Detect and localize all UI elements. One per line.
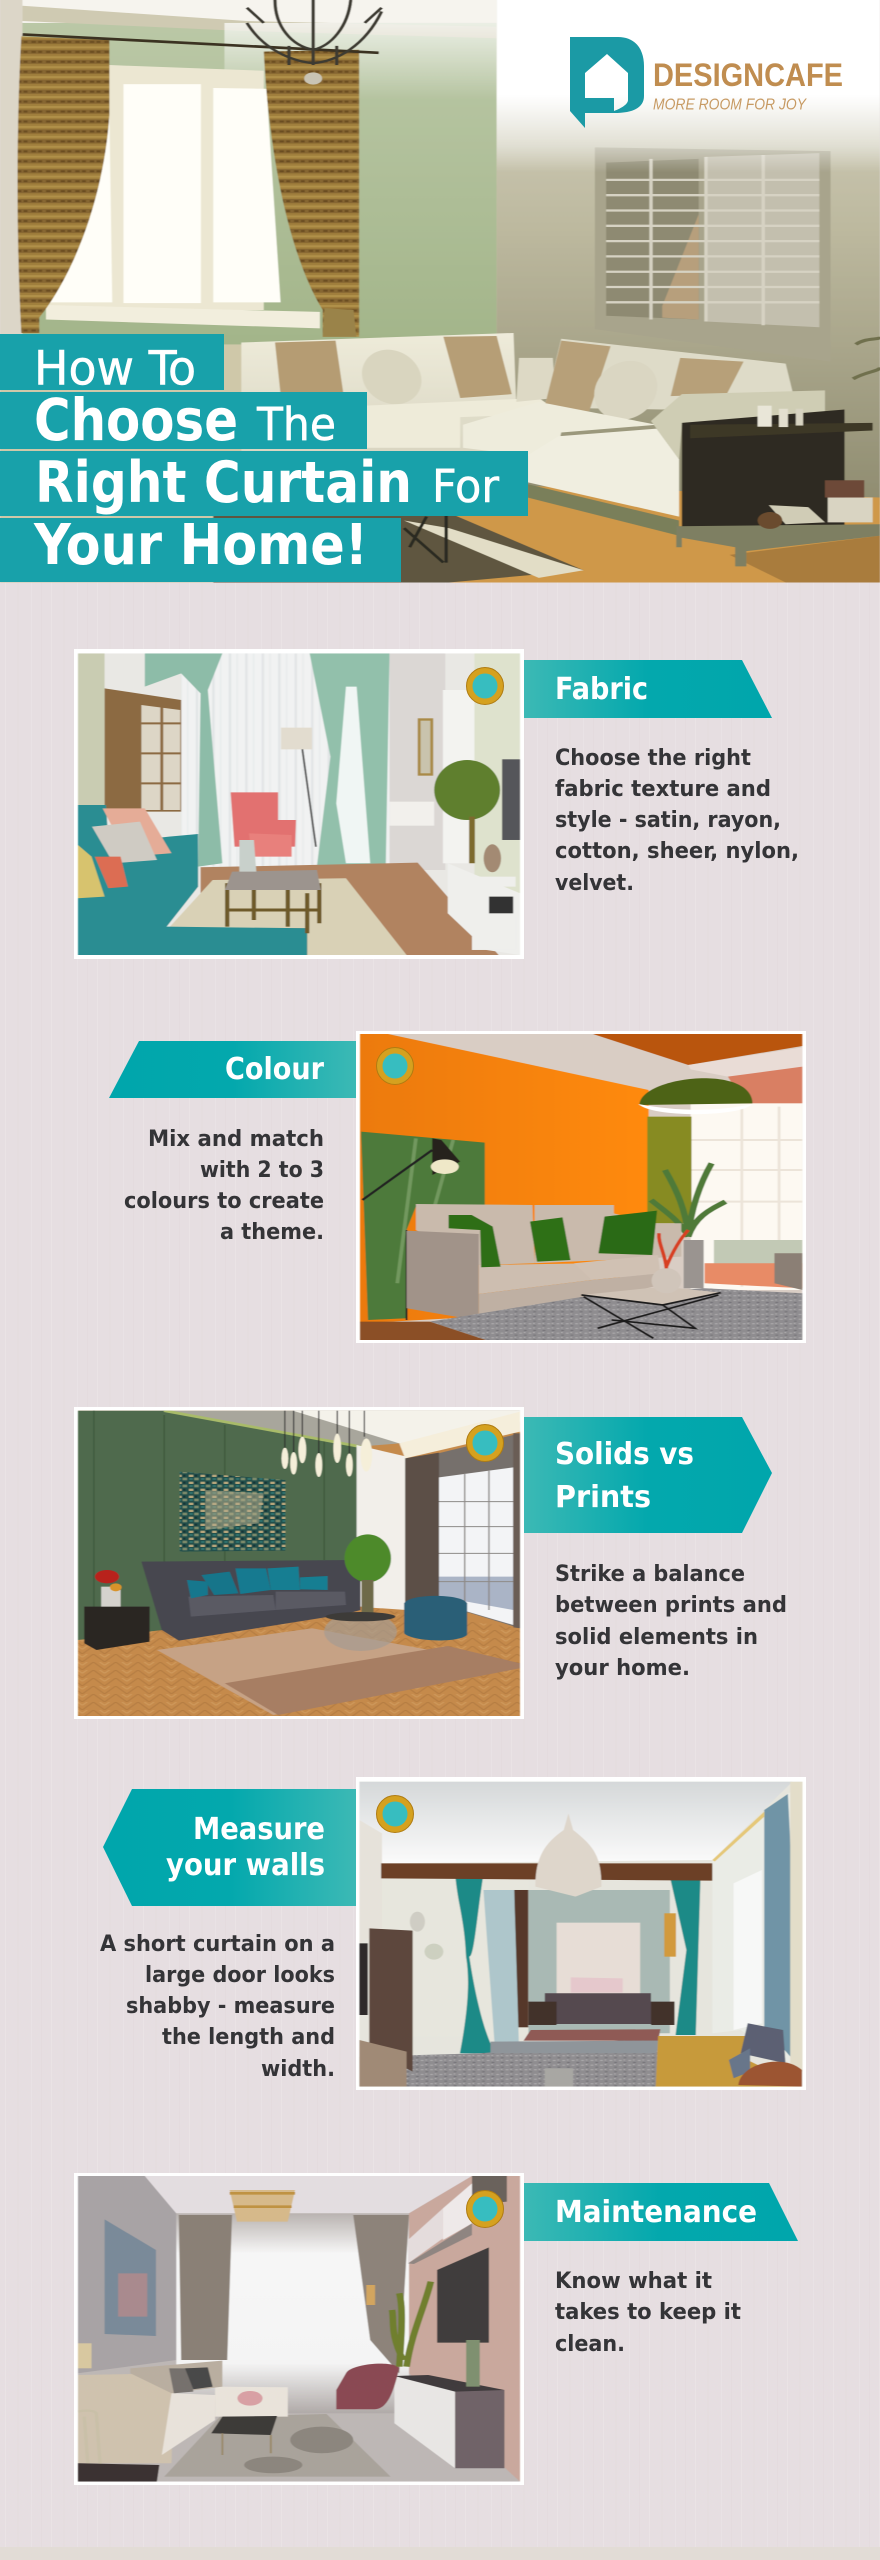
text: colour description: a theme. [220,1219,324,1245]
text: fabric description [555,745,799,896]
text: solids description: solid elements in [555,1624,758,1650]
title line: How To: How To [34,342,196,396]
icon: house speech mark [570,37,644,128]
icon: gold curtain ring [376,1796,414,1832]
heading: maintenance: Maintenance [555,2195,757,2230]
heading: fabric: Fabric [555,672,648,707]
text: measure description: the length and [162,2024,335,2050]
photo: green wall room [78,1411,520,1716]
text: measure description [100,1931,335,2082]
ribbon: fabric [524,660,772,718]
text: maintenance description: takes to keep it [555,2299,741,2325]
text: maintenance description: clean. [555,2331,625,2357]
photo: neutral lounge [78,2176,520,2482]
text: fabric description: style - satin, rayon, [555,807,781,833]
hero photo: living room [0,0,880,582]
text: colour description: colours to create [124,1188,324,1214]
ribbon: measure your walls [103,1789,356,1906]
text: fabric description: cotton, sheer, nylon, [555,838,799,864]
text: solids description: Strike a balance [555,1561,745,1587]
photo frame: fabric [74,649,524,959]
text: maintenance description [555,2268,741,2357]
text: maintenance description: Know what it [555,2268,712,2294]
title line: Right Curtain For: For [432,460,499,513]
photo: orange wall room [360,1034,802,1340]
icon: gold curtain ring [376,1048,414,1084]
heading: solids vs prints: Prints [555,1480,651,1515]
heading: solids vs prints: Solids vs [555,1437,694,1472]
title line: Choose The: The [256,398,336,451]
photo: teal sofa room [78,653,520,955]
title line: Your Home!: Your Home! [33,513,368,578]
ribbon: solids vs prints [524,1417,772,1533]
title bands [0,334,528,582]
footer band [0,2547,880,2560]
text: solids description: your home. [555,1655,690,1681]
panel: solids vs prints [74,1407,787,1719]
text: fabric description: fabric texture and [555,776,771,802]
brand name: DESIGNCAFE [653,57,843,93]
text: colour description: Mix and match [148,1126,324,1152]
panel: fabric [74,649,799,959]
icon: gold curtain ring [466,668,504,704]
text: fabric description: velvet. [555,870,634,896]
tagline: MORE ROOM FOR JOY [653,96,807,114]
panel: colour [109,1031,806,1343]
text: measure description: A short curtain on a [100,1931,335,1957]
text: measure description: shabby - measure [126,1993,335,2019]
ribbon: maintenance [524,2183,798,2241]
panel: measure your walls [100,1777,806,2090]
text: colour description: with 2 to 3 [200,1157,324,1183]
title line: Right Curtain For: Right Curtain [35,450,412,516]
heading: colour: Colour [225,1052,325,1087]
ribbon: colour [109,1041,356,1098]
photo: teal curtain bedroom [359,1782,802,2087]
text: colour description [124,1126,324,1245]
icon: gold curtain ring [466,2190,504,2228]
text: measure description: large door looks [145,1962,335,1988]
icon: gold curtain ring [466,1424,504,1462]
photo frame: solids [74,1407,524,1719]
text: solids description [555,1561,787,1681]
heading: measure your walls: Measure [193,1812,325,1847]
logo: DesignCafe [570,37,843,128]
hero banner [0,0,880,582]
heading: measure your walls [166,1812,325,1883]
heading: measure your walls: your walls [166,1848,325,1883]
photo frame: measure [356,1777,806,2090]
heading: solids vs prints [555,1437,694,1515]
text: measure description: width. [261,2056,335,2082]
photo frame: colour [356,1031,806,1343]
photo frame: maintenance [74,2173,524,2485]
panel: maintenance [74,2173,798,2485]
text: solids description: between prints and [555,1592,787,1618]
text: fabric description: Choose the right [555,745,751,771]
title line: Choose The: Choose [34,386,238,454]
